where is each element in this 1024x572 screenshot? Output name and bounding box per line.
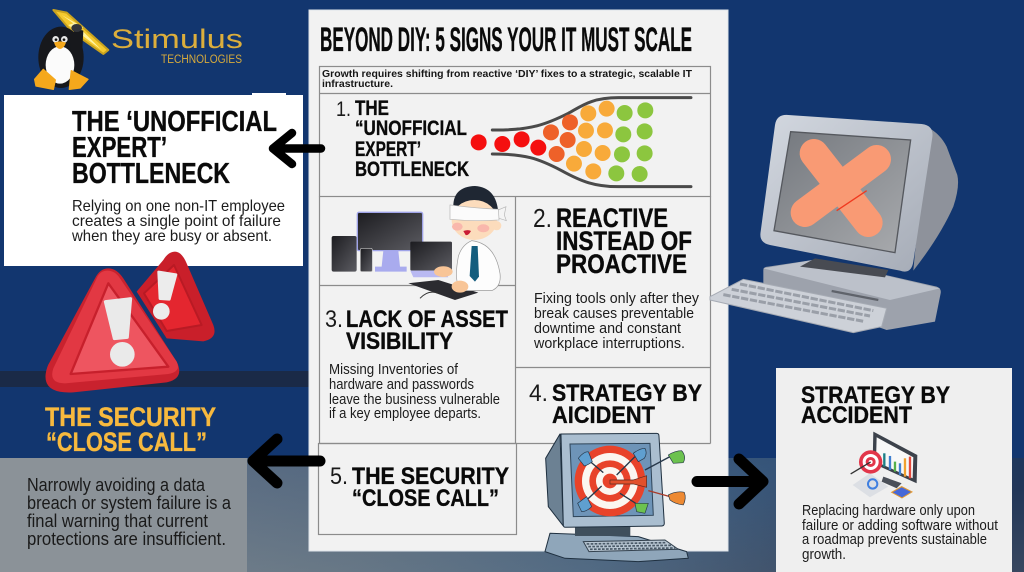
icon: target and chart xyxy=(851,432,917,498)
sign 2 heading: INSTEAD OF xyxy=(556,226,692,256)
heading: ACCIDENT xyxy=(801,402,912,429)
arrow: to strategy by accident xyxy=(697,459,763,504)
arrow: to security close call xyxy=(253,439,320,483)
icon: penguin with lightning bolt xyxy=(35,10,108,89)
sign 4 heading: STRATEGY BY xyxy=(552,380,702,407)
body text: growth. xyxy=(802,547,846,563)
darts xyxy=(578,448,685,513)
sign 3 heading xyxy=(325,306,508,355)
heading: security close call xyxy=(45,402,216,457)
body text: Replacing hardware only upon xyxy=(802,503,975,519)
body text xyxy=(71,198,285,245)
logo subtitle: TECHNOLOGIES xyxy=(161,54,242,66)
intro text: infrastructure. xyxy=(322,78,393,90)
sign 2 text: Fixing tools only after they xyxy=(534,291,700,307)
intro text: Growth requires shifting from reactive ‘DIY’ fixes to a strategic, scalable IT xyxy=(322,68,693,80)
logo: Stimulus Technologies xyxy=(35,10,243,89)
body text: failure or adding software without xyxy=(802,518,998,534)
sign 3 heading: LACK OF ASSET xyxy=(346,306,508,333)
sign 2 text xyxy=(533,291,700,352)
sign 2 heading: PROACTIVE xyxy=(556,249,687,279)
body text: Relying on one non-IT employee xyxy=(72,198,285,215)
sign 4 heading: AICIDENT xyxy=(552,402,655,429)
icon: patched retro computer xyxy=(710,115,958,333)
sign 3 text: Missing Inventories of xyxy=(329,362,459,378)
sign 4 heading xyxy=(529,380,702,429)
body text: Narrowly avoiding a data xyxy=(27,475,206,495)
body text: breach or system failure is a xyxy=(27,493,232,513)
heading xyxy=(72,106,277,190)
sign 2 text: break causes preventable xyxy=(534,306,694,322)
heading: security close call: “CLOSE CALL” xyxy=(46,427,207,457)
table grid xyxy=(318,66,710,534)
sign 5 heading: 5. xyxy=(330,463,348,490)
sign 2 heading: 2. xyxy=(533,203,552,233)
heading: EXPERT’ xyxy=(72,132,167,164)
heading xyxy=(801,382,950,429)
panel: strategy by accident callout xyxy=(776,368,1012,572)
sign 1 heading: BOTTLENECK xyxy=(355,158,469,181)
logo wordmark: Stimulus xyxy=(111,24,243,54)
sign 5 heading: “CLOSE CALL” xyxy=(352,485,499,512)
sign 2 heading: REACTIVE xyxy=(556,203,668,233)
sign 2 text: workplace interruptions. xyxy=(533,336,685,352)
arrow: to unofficial expert xyxy=(273,133,321,164)
body text: protections are insufficient. xyxy=(27,529,226,549)
icon: warning triangles xyxy=(45,252,215,392)
sign 3 text: leave the business vulnerable xyxy=(329,392,500,408)
illustration: devices and blindfolded man xyxy=(332,186,506,300)
heading: security close call: THE SECURITY xyxy=(45,402,216,432)
sign 1 heading: THE xyxy=(355,97,389,120)
sign 2 heading xyxy=(533,203,692,279)
heading: THE ‘UNOFFICIAL xyxy=(72,106,277,138)
body text: when they are busy or absent. xyxy=(71,228,272,245)
sign 3 text xyxy=(329,362,500,422)
main panel xyxy=(309,10,728,551)
heading: STRATEGY BY xyxy=(801,382,950,409)
sign 3 heading: VISIBILITY xyxy=(346,328,453,355)
panel: security close call text xyxy=(0,458,247,572)
intro text xyxy=(322,68,693,90)
sign 1 heading: “UNOFFICIAL xyxy=(355,117,467,140)
sign 1 heading xyxy=(336,97,469,181)
sign 5 heading: THE SECURITY xyxy=(352,463,509,490)
illustration: computer with dart target xyxy=(545,433,688,562)
sign 1 heading: 1. xyxy=(336,98,351,121)
sign 2 text: downtime and constant xyxy=(534,321,681,337)
heading: BOTTLENECK xyxy=(72,158,230,190)
sign 1 heading: EXPERT’ xyxy=(355,138,421,161)
sign 3 text: if a key employee departs. xyxy=(329,406,481,422)
sign 4 heading: 4. xyxy=(529,380,548,407)
sign 3 text: hardware and passwords xyxy=(329,377,474,393)
sign 5 heading xyxy=(330,463,509,512)
body text: final warning that current xyxy=(27,511,208,531)
body text xyxy=(27,475,232,549)
body text: a roadmap prevents sustainable xyxy=(802,532,987,548)
body text xyxy=(802,503,998,563)
body text: creates a single point of failure xyxy=(72,213,281,230)
funnel diagram xyxy=(471,98,691,187)
sign 3 heading: 3. xyxy=(325,306,343,333)
panel: unofficial expert callout xyxy=(4,93,303,266)
